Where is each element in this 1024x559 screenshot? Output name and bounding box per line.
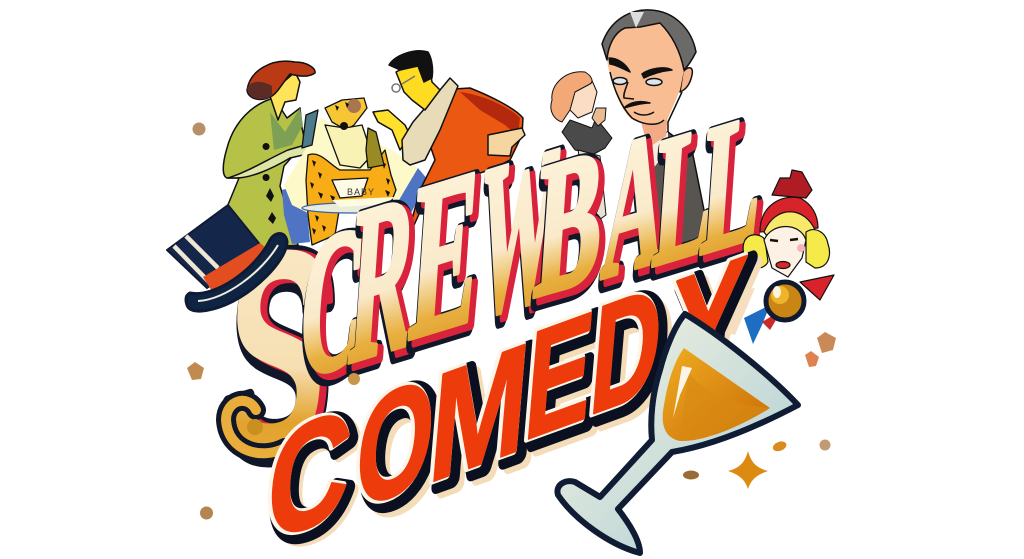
grey hair (602, 10, 696, 70)
red ribbon (762, 310, 782, 330)
ball highlight (771, 286, 789, 304)
grey vest behind title (640, 132, 708, 270)
letter B: B (531, 109, 612, 344)
figure: blonde woman with red headband (743, 170, 834, 300)
letter Y: Y (667, 226, 756, 426)
bowl labelled BABY (302, 178, 398, 213)
hat red band (203, 243, 278, 296)
cane stick (727, 288, 755, 335)
letter M: M (421, 309, 534, 517)
letter B: B (534, 108, 615, 343)
face and neck (270, 72, 300, 120)
feather bow (772, 170, 812, 198)
letter D: D (585, 250, 669, 449)
glass bowl, stem and foot (557, 314, 798, 553)
dark jacket (562, 118, 612, 154)
figure: man with moustache caricature (602, 10, 708, 270)
big swash letter S: S (212, 191, 353, 516)
bowl labelled BABY: BABY (347, 187, 375, 197)
dark hair shade (247, 82, 272, 99)
white skirt (578, 150, 606, 225)
hat crown (167, 205, 262, 288)
face (607, 23, 684, 125)
letter E: E (523, 282, 604, 479)
letter W: W (472, 98, 564, 364)
glass highlight (673, 366, 692, 418)
green coat (223, 98, 320, 250)
dark hair (389, 51, 433, 82)
ear (680, 68, 692, 92)
neck (640, 112, 668, 148)
leopard spots (310, 102, 390, 235)
hat brim (186, 234, 287, 311)
cheeks (797, 244, 805, 252)
inner curl colour (226, 401, 285, 453)
second letter L: L (696, 70, 769, 294)
title word: SCREWBALL (293, 70, 774, 427)
confetti dots on S (247, 373, 360, 435)
letter E: E (406, 124, 489, 393)
gold ball (766, 282, 804, 320)
second letter L: L (698, 75, 771, 299)
sleeve and hand (228, 143, 322, 178)
head and neck (396, 56, 440, 110)
letter R: R (345, 149, 426, 417)
leopard nose (340, 122, 348, 130)
coat shading (270, 108, 303, 150)
letter E: E (519, 278, 600, 475)
second letter L: L (701, 74, 774, 298)
left curls (743, 235, 768, 268)
icon: gold ball cane with blue bow (727, 282, 804, 344)
panel: blue background blot behind leopard (282, 168, 428, 244)
red hair (247, 61, 315, 99)
icon: cocktail martini glass (557, 314, 798, 553)
figure: small blonde woman in dark jacket (551, 72, 612, 225)
letter D: D (589, 254, 673, 453)
blue sleeve (302, 110, 318, 148)
icon: top hat (167, 205, 287, 311)
blue bow (744, 305, 770, 344)
letter Y: Y (661, 222, 750, 422)
hair highlight (630, 12, 644, 28)
eyes (613, 78, 627, 84)
figure: man in orange robe (373, 51, 525, 245)
fur collar (402, 78, 458, 165)
decorative confetti dots (187, 122, 836, 520)
letter A: A (602, 91, 677, 325)
letter Y: Y (663, 222, 752, 422)
letter M: M (427, 313, 540, 521)
letter O: O (348, 343, 439, 544)
face (565, 76, 597, 118)
letter M: M (423, 309, 536, 517)
hand cuff (488, 128, 525, 156)
first letter L: L (648, 82, 721, 306)
drink surface (680, 372, 770, 441)
letter C: C (293, 179, 372, 422)
letter O: O (350, 343, 441, 544)
eyes (770, 239, 798, 241)
pale backdrop (284, 118, 418, 215)
brown spot on head (347, 99, 361, 113)
letter E: E (404, 119, 487, 388)
figure: leopard with baby bowl (284, 98, 418, 245)
hat stripes (174, 236, 218, 283)
right curls (806, 230, 829, 268)
icon: orange sparkle star (728, 451, 768, 489)
letter M: M (432, 318, 545, 526)
robe dark red (460, 92, 520, 136)
big swash letter S: S (206, 189, 347, 514)
drink (663, 348, 770, 441)
letter W: W (477, 102, 569, 368)
letter R: R (343, 144, 424, 412)
curled orange hair (551, 72, 592, 122)
coat buttons (263, 143, 276, 224)
letter E: E (528, 287, 609, 484)
bib (325, 125, 372, 168)
letter O: O (359, 352, 450, 553)
nose line (624, 82, 634, 99)
letter A: A (599, 92, 674, 326)
leopard body (306, 150, 396, 245)
shirt and tie (643, 132, 668, 175)
letter C: C (298, 183, 377, 426)
orange robe (405, 88, 523, 245)
letter W: W (474, 103, 566, 369)
glasses (392, 76, 415, 92)
letter A: A (597, 87, 672, 321)
arm reaching with hand (373, 110, 410, 150)
moustache (624, 102, 650, 108)
letter R: R (348, 148, 429, 416)
letter E: E (517, 278, 598, 475)
letter B: B (529, 104, 610, 339)
red headband (760, 197, 818, 232)
letter Y: Y (672, 231, 761, 431)
eyebrows (609, 58, 672, 78)
letter D: D (594, 259, 678, 458)
yellow hair (764, 212, 816, 240)
first letter L: L (650, 87, 723, 311)
small doll (366, 128, 384, 168)
big swash letter S: S (210, 193, 351, 518)
letter E: E (409, 123, 492, 392)
letter D: D (583, 250, 667, 449)
lips (776, 262, 790, 268)
mouth line (634, 112, 654, 115)
red dress (800, 275, 834, 300)
letter O: O (354, 347, 445, 548)
letter C: C (295, 184, 374, 427)
brim highlight (198, 245, 278, 301)
face (764, 226, 806, 277)
swash curl at the foot of S (226, 401, 285, 453)
praying hand (592, 108, 606, 126)
jaw line (610, 72, 682, 132)
title word: COMEDY (259, 222, 761, 559)
leopard head (325, 98, 367, 130)
first letter L: L (653, 86, 726, 310)
figure: woman in green coat (223, 61, 322, 250)
